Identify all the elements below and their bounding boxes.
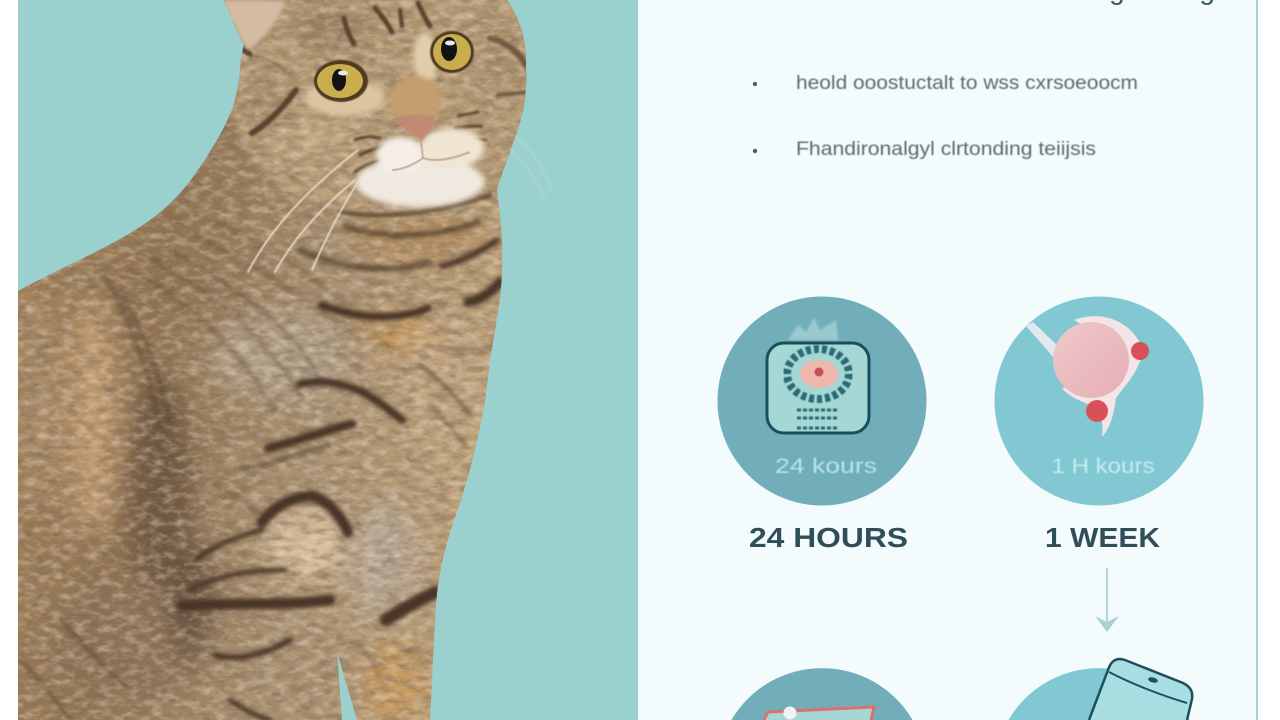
eye left bbox=[314, 60, 368, 102]
panel: teal photo background bbox=[18, 0, 638, 720]
cat body fur base bbox=[18, 0, 538, 720]
faint whiskers over background bbox=[505, 130, 552, 200]
icon: red frame bbox=[764, 706, 874, 720]
circle caption: 1 H kours bbox=[1052, 455, 1154, 478]
icon: phone bbox=[1089, 659, 1192, 720]
head markings bbox=[238, 3, 526, 215]
step: 1 week bbox=[994, 296, 1204, 506]
bullet list bbox=[753, 73, 1138, 160]
head shading patches bbox=[246, 12, 521, 149]
icon: monitor with wound bbox=[767, 318, 869, 433]
icon: pink healing incision bbox=[1026, 316, 1149, 437]
step: 24 hours bbox=[718, 296, 926, 506]
arrow bbox=[1095, 568, 1119, 632]
cat head base bbox=[210, 0, 530, 220]
muzzle bbox=[356, 128, 484, 207]
bullet one: heold ooostuctalt to wss cxrsoeoocm bbox=[796, 73, 1138, 94]
mouth bbox=[392, 141, 470, 170]
fur texture light bbox=[18, 0, 538, 720]
label: 24 hours: 24 HOURS bbox=[749, 522, 908, 553]
bullet two: Fhandironalgyl clrtonding teiijsis bbox=[796, 139, 1096, 160]
panel: timeline card bbox=[638, 0, 1258, 720]
step: lower right bbox=[1008, 659, 1192, 720]
label: 1 week: 1 WEEK bbox=[1045, 522, 1160, 553]
eye right bbox=[430, 31, 474, 73]
circle bbox=[731, 668, 913, 720]
cat whiskers bbox=[248, 150, 358, 272]
cat head details bbox=[222, 0, 526, 215]
ear bbox=[222, 0, 285, 50]
cat photo illustration bbox=[18, 0, 538, 720]
fur texture dark bbox=[18, 0, 538, 720]
circle bbox=[718, 296, 926, 506]
circle bbox=[994, 296, 1204, 506]
circle bbox=[1008, 668, 1190, 720]
forehead light patch bbox=[413, 32, 437, 84]
nose bridge bbox=[389, 76, 441, 124]
cat coat colour patches bbox=[22, 212, 490, 720]
circle caption: 24 kours bbox=[775, 455, 877, 478]
cat tabby stripes bbox=[20, 220, 500, 720]
nose bbox=[393, 115, 436, 141]
step: lower left bbox=[731, 668, 913, 720]
eye surround bbox=[305, 80, 385, 116]
